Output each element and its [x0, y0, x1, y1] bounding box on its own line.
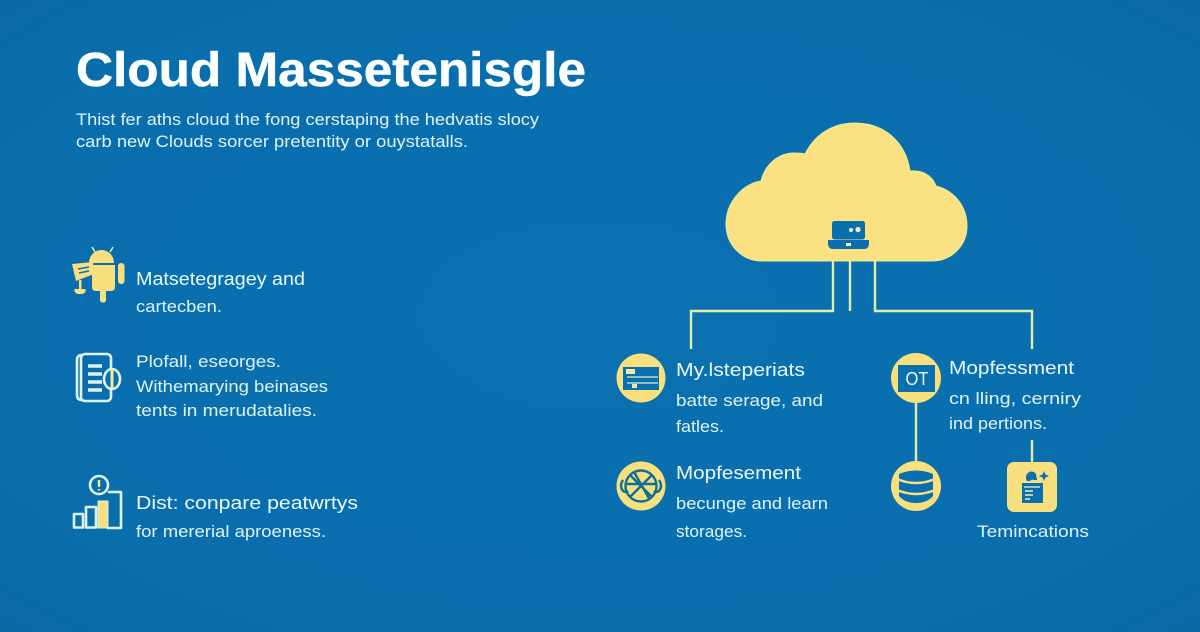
icon: globe circle [616, 462, 666, 510]
node text 3: cn lling, cerniry [949, 389, 1082, 408]
node text 2: becunge and learn [676, 494, 828, 513]
node text 3 [949, 358, 1082, 433]
intro text: Thist fer aths cloud the fong cerstaping the hedvatis slocy [76, 110, 540, 129]
feature text 2: tents in merudatalies. [136, 401, 317, 420]
icon: OT circle: OT [906, 369, 929, 389]
icon: panel window circle [616, 354, 666, 402]
feature text 3: Dist: conpare peatwrtys [136, 493, 358, 513]
node text 1: My.lsteperiats [676, 360, 805, 380]
node text 1 [676, 360, 823, 436]
icon: android with flag [72, 247, 124, 302]
node text 1: batte serage, and [676, 391, 823, 410]
panel: cloud diagram [616, 123, 1089, 541]
node text 1: fatles. [676, 417, 724, 436]
panel: left feature list [72, 247, 358, 541]
icon: bar chart with alert [74, 476, 121, 528]
feature text 2: Withemarying beinases [136, 377, 328, 396]
icon: termination card [1007, 462, 1057, 512]
feature text 1: Matsetegragey and [136, 269, 305, 289]
node text 2: storages. [676, 522, 747, 541]
feature text 1 [136, 269, 305, 316]
connector lines [691, 261, 1032, 462]
feature text 3: for mererial aproeness. [136, 522, 326, 541]
feature text 2 [136, 352, 328, 420]
intro text [76, 110, 540, 151]
node text 3: ind pertions. [949, 414, 1047, 433]
title: Cloud Massetenisgle [76, 44, 586, 97]
node text 3: Mopfessment [949, 358, 1074, 378]
icon: database circle [891, 461, 941, 511]
feature text 2: Plofall, eseorges. [136, 352, 281, 371]
icon: document clipboard [77, 354, 120, 401]
feature text 1: cartecben. [136, 297, 222, 316]
intro text: carb new Clouds sorcer pretentity or ouystatalls. [76, 132, 468, 151]
icon: laptop [828, 221, 869, 249]
node text 2 [676, 463, 828, 541]
icon: OT circle [891, 353, 941, 403]
node label: terminations: Temincations [977, 522, 1089, 541]
icon: cloud [726, 123, 967, 261]
feature text 3 [136, 493, 358, 541]
node text 2: Mopfesement [676, 463, 801, 483]
